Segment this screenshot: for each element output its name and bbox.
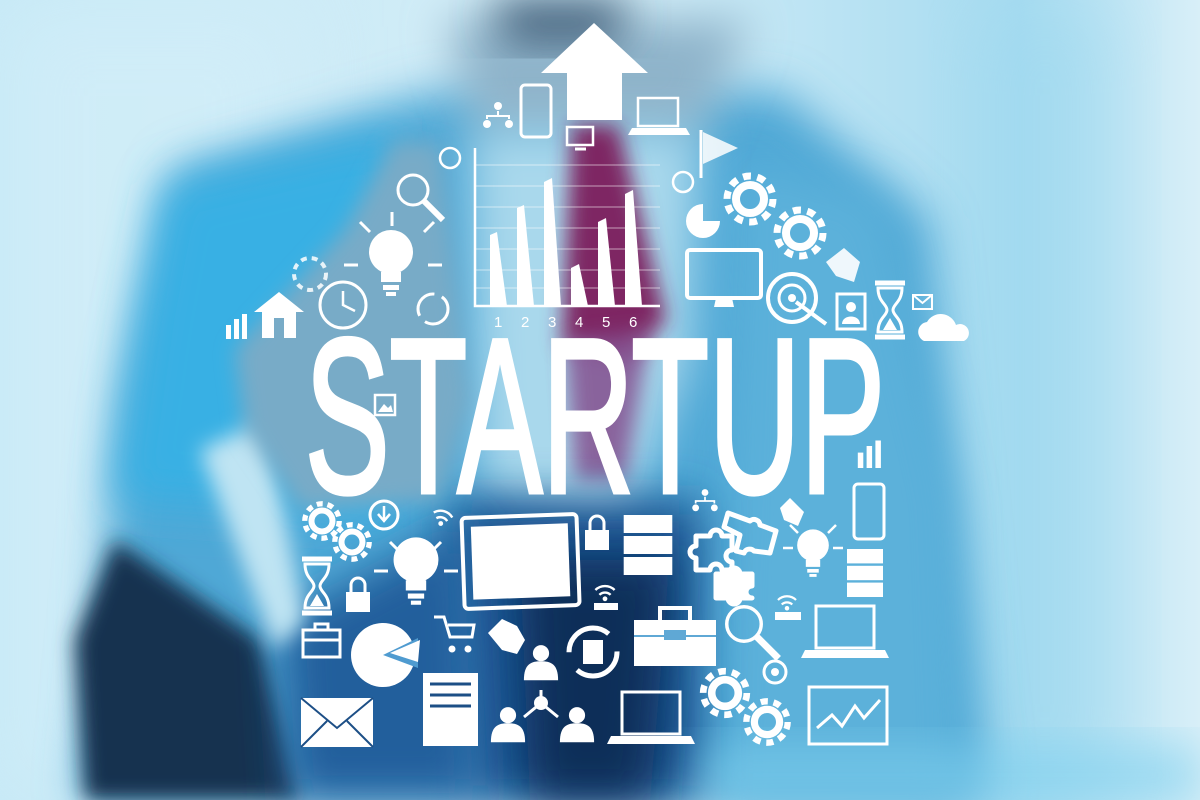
icon: puzzle pieces xyxy=(690,513,776,604)
icon group: lower right xyxy=(703,596,889,744)
icon group: right wall xyxy=(690,440,884,604)
axis numbers xyxy=(494,314,637,331)
icon group: upper left of roof xyxy=(226,85,593,339)
icon group: lower left xyxy=(301,501,478,747)
axis numbers: 2 xyxy=(521,314,529,331)
icon group: upper right of roof xyxy=(628,98,969,341)
icon: small picture on finger xyxy=(375,395,395,415)
bar chart xyxy=(475,148,660,331)
axis numbers: 4 xyxy=(575,314,583,331)
icon: up arrow xyxy=(541,23,648,120)
axis numbers: 5 xyxy=(602,314,610,331)
axis numbers: 6 xyxy=(629,314,637,331)
axis numbers: 3 xyxy=(548,314,556,331)
icon group: lower centre xyxy=(461,514,716,744)
axis numbers: 1 xyxy=(494,314,502,331)
